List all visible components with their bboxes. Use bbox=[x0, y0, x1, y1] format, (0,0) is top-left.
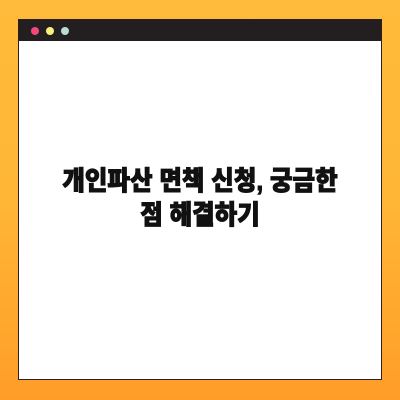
title: 점 해결하기 bbox=[140, 200, 260, 230]
window title bar bbox=[19, 20, 381, 41]
icon: pink window dot bbox=[31, 27, 39, 35]
title: 개인파산 면책 신청, 궁금한 bbox=[62, 166, 338, 196]
icon: light blue window dot bbox=[61, 27, 69, 35]
icon: yellow window dot bbox=[46, 27, 54, 35]
title bbox=[62, 166, 338, 230]
